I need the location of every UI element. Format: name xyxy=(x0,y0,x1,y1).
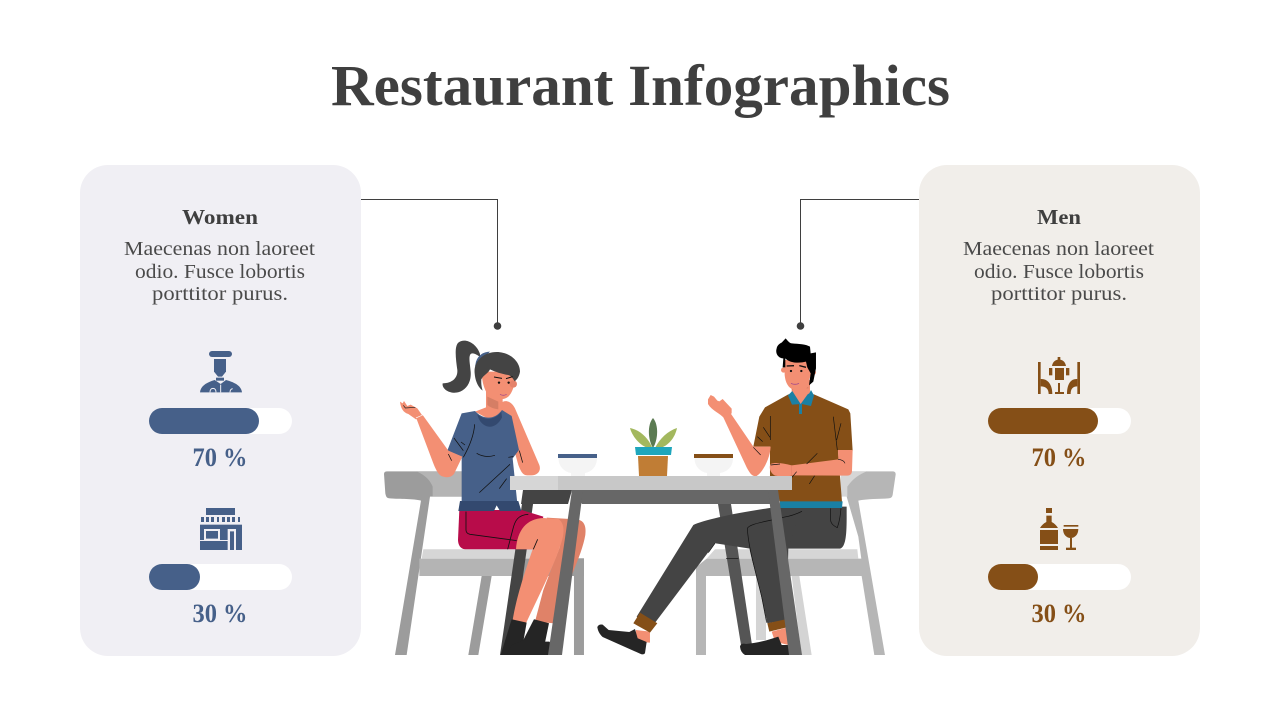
value: women 70%: 70 % xyxy=(192,443,248,472)
bowl: brown xyxy=(694,454,733,476)
heading: women: Women xyxy=(182,205,258,229)
ponytail xyxy=(443,341,480,393)
title: Restaurant Infographics xyxy=(331,53,950,118)
chair: right xyxy=(696,471,896,655)
shoes xyxy=(501,619,562,655)
panel: women xyxy=(80,165,361,656)
shirt xyxy=(753,394,853,502)
hair xyxy=(475,352,520,391)
icon: chef xyxy=(200,351,242,392)
man xyxy=(633,338,853,655)
gesture arm xyxy=(723,413,771,476)
progress bar: women 70% xyxy=(149,408,292,434)
panel: men xyxy=(919,165,1200,656)
connector: women panel to woman xyxy=(361,200,501,330)
table: back legs xyxy=(500,490,752,655)
progress bar: men 30% xyxy=(988,564,1131,590)
legs xyxy=(535,518,586,623)
icon: wine bottle and glass xyxy=(1040,508,1078,550)
value: men 70%: 70 % xyxy=(1032,443,1086,472)
shorts lines xyxy=(466,512,538,549)
text block: men description: Maecenas non laoreet xyxy=(963,239,1155,260)
man's far foot xyxy=(635,630,650,643)
plant pot xyxy=(630,418,677,476)
text block: women description: porttitor purus. xyxy=(152,284,288,305)
table: top and front legs xyxy=(510,476,802,655)
value: men 30%: 30 % xyxy=(1032,599,1086,628)
creases xyxy=(753,416,845,484)
ears and face xyxy=(781,367,786,373)
shirt creases xyxy=(448,424,523,493)
text block: women description xyxy=(124,239,316,305)
heading: men: Men xyxy=(1037,205,1081,229)
chair: left xyxy=(384,471,584,655)
far arm hand at chin xyxy=(500,401,540,475)
woman xyxy=(400,341,650,655)
text block: women description: odio. Fusce lobortis xyxy=(135,262,305,283)
progress bar: men 70% xyxy=(988,408,1131,434)
icon: dining table xyxy=(1038,357,1080,394)
near arm xyxy=(416,415,462,477)
bowl: blue xyxy=(558,454,597,476)
shirt xyxy=(447,410,519,503)
neck xyxy=(475,387,512,423)
illustration: dining scene xyxy=(384,338,896,655)
near leg xyxy=(747,512,800,623)
text block: men description: odio. Fusce lobortis xyxy=(974,262,1144,283)
forearm xyxy=(770,450,853,476)
text block: men description: porttitor purus. xyxy=(991,284,1127,305)
collar xyxy=(788,390,814,406)
far leg xyxy=(637,507,847,632)
connector: men panel to man xyxy=(797,200,919,330)
icon: restaurant building xyxy=(200,508,242,550)
hair xyxy=(776,338,816,385)
progress bar: women 30% xyxy=(149,564,292,590)
text block: men description xyxy=(963,239,1155,305)
shorts xyxy=(458,510,543,549)
face xyxy=(482,372,515,399)
text block: women description: Maecenas non laoreet xyxy=(124,239,316,260)
value: women 30%: 30 % xyxy=(192,599,248,628)
neck xyxy=(792,380,810,402)
